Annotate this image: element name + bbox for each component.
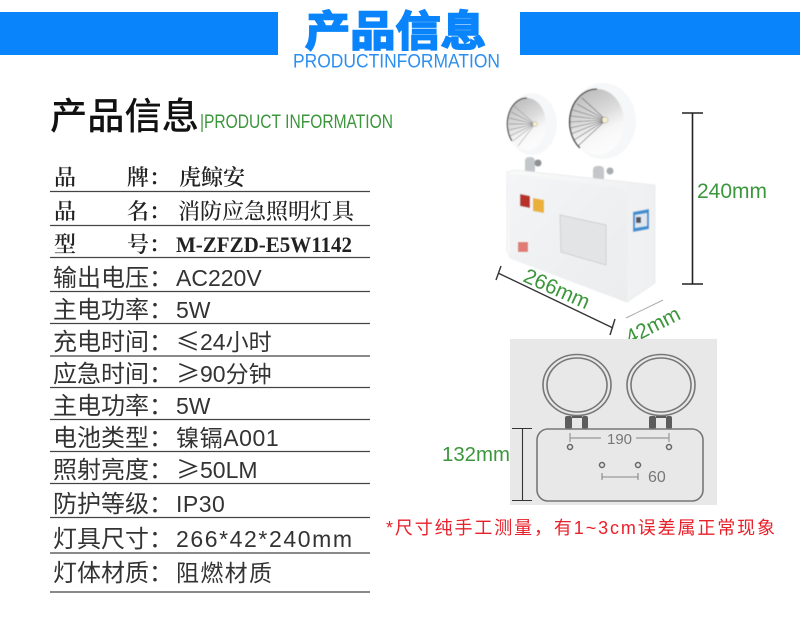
row: charge time	[53, 322, 272, 357]
row: protection: 防护等级：	[53, 491, 173, 518]
technical drawing panel	[510, 339, 717, 505]
section heading english: |PRODUCT INFORMATION	[200, 112, 393, 133]
product photo: emergency light	[507, 83, 655, 302]
row: protection: IP30	[176, 491, 225, 517]
spec table	[50, 161, 370, 592]
row: battery: 电池类型：	[53, 425, 173, 452]
row: dimensions	[53, 526, 352, 553]
side label	[633, 209, 649, 232]
section heading	[50, 86, 393, 140]
section heading: 产品信息	[50, 86, 199, 140]
drawing body	[537, 429, 703, 501]
row: name: 品	[54, 195, 76, 226]
right lamp head	[570, 83, 636, 159]
row: mains power: 5W	[176, 297, 211, 323]
row: mains power: 主电功率：	[53, 297, 173, 324]
mounting holes	[568, 444, 672, 468]
dimension 190	[570, 431, 669, 448]
control panel	[560, 215, 606, 265]
row: dimensions: 266*42*240mm	[176, 526, 352, 552]
row: model: 号：	[127, 228, 171, 259]
dimension 60	[602, 469, 666, 486]
dimension 190: 190	[607, 431, 632, 448]
left ring	[543, 354, 611, 416]
row: brand: 品	[54, 161, 76, 192]
banner subtitle: PRODUCTINFORMATION	[293, 52, 500, 72]
lamp brackets	[525, 157, 614, 184]
row: brightness	[53, 450, 258, 485]
row: name: 消防应急照明灯具	[178, 195, 356, 226]
row: brand: 虎鲸安	[179, 161, 246, 192]
brackets	[565, 416, 672, 429]
row: mains power 2: 主电功率：	[53, 393, 173, 420]
row: emergency time	[53, 354, 272, 389]
dimension: depth 42mm: 42mm	[622, 302, 684, 349]
row: mains power 2: 5W	[176, 393, 211, 419]
lamp body	[507, 170, 655, 302]
row: model: 型	[54, 228, 76, 259]
row: material: 阻燃材质	[176, 560, 272, 586]
row: battery	[53, 425, 279, 452]
row: brightness: 照射亮度：	[53, 457, 173, 484]
dimension: width 266mm: 266mm	[520, 265, 593, 314]
left lamp head	[507, 93, 557, 155]
row: emergency time: ≥90分钟	[176, 354, 272, 389]
row: dimensions: 灯具尺寸：	[53, 526, 173, 553]
dimension: height 240mm: 240mm	[697, 180, 767, 203]
row: output voltage: AC220V	[176, 265, 262, 291]
red and yellow indicators	[520, 194, 544, 213]
row: model: M-ZFZD-E5W1142	[176, 232, 352, 257]
row: output voltage: 输出电压：	[53, 265, 173, 292]
row: charge time: ≤24小时	[176, 322, 272, 357]
row: material: 灯体材质：	[53, 560, 173, 587]
right ring	[627, 354, 695, 416]
dimension 60: 60	[648, 469, 666, 486]
red mark	[518, 242, 528, 252]
row: model	[54, 228, 352, 259]
row: name	[54, 195, 356, 226]
dimension: 132mm	[442, 428, 532, 500]
row: brand: 牌：	[127, 161, 171, 192]
row: brand	[54, 161, 246, 192]
row: output voltage	[53, 265, 262, 292]
row: protection	[53, 491, 225, 518]
dimension: 132mm: 132mm	[442, 444, 510, 466]
row: battery: 镍镉A001	[176, 425, 279, 451]
row: material	[53, 560, 272, 587]
disclaimer note: *尺寸纯手工测量，有1~3cm误差属正常现象	[386, 518, 775, 538]
row: brightness: ≥50LM	[176, 450, 258, 485]
banner: header	[0, 0, 800, 72]
row: name: 名：	[127, 195, 171, 226]
row: emergency time: 应急时间：	[53, 361, 173, 388]
dimension: width 266mm	[496, 265, 615, 335]
row: charge time: 充电时间：	[53, 329, 173, 356]
